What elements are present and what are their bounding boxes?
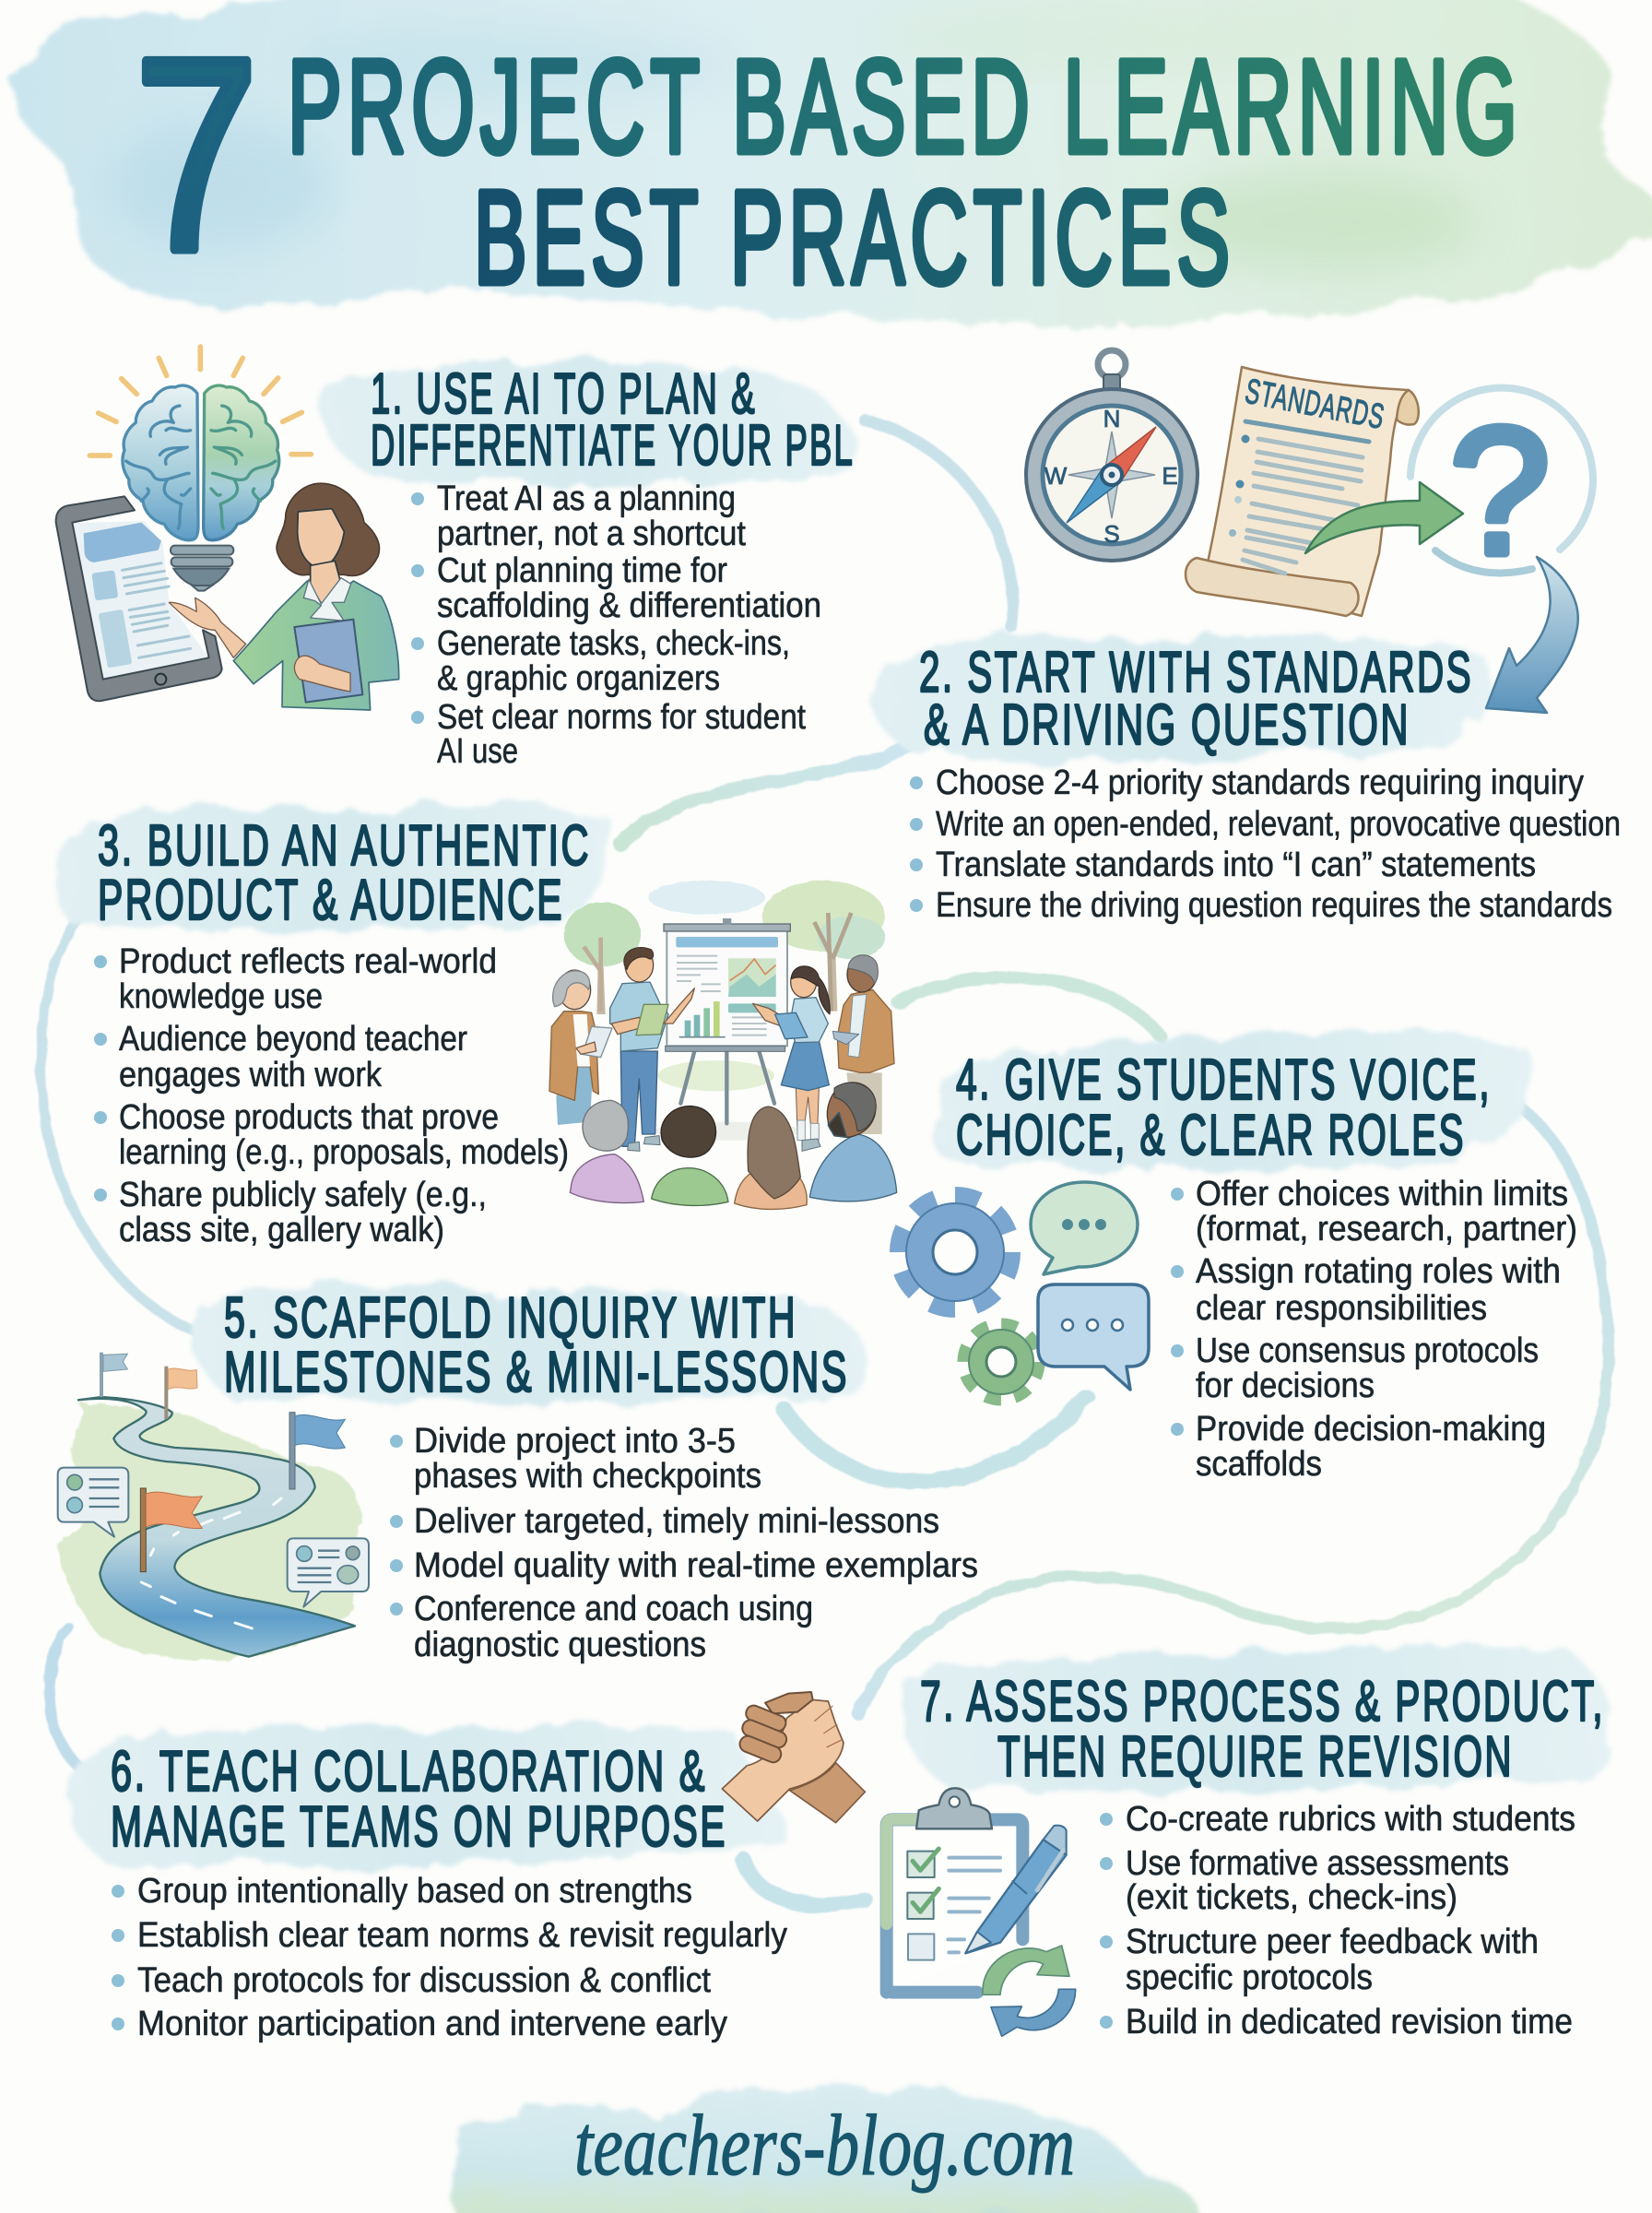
bullets 4: scaffolds (1196, 1445, 1322, 1484)
bullets 4 (1171, 1175, 1577, 1484)
bullets 1: Generate tasks, check-ins, (437, 624, 790, 663)
bullets 4: Offer choices within limits (1196, 1175, 1568, 1213)
connector 4 to 7 (858, 1105, 1608, 1715)
illustration: winding road with flags (58, 1353, 369, 1661)
person: older man with tablet (832, 955, 894, 1134)
heading 2: & A DRIVING QUESTION (924, 693, 1410, 757)
bullets 4: clear responsibilities (1196, 1289, 1487, 1328)
bullets 6: Establish clear team norms & revisit regularly (137, 1916, 787, 1955)
bullets 3: class site, gallery walk) (119, 1211, 444, 1249)
bullets 5 (390, 1422, 978, 1664)
icon: clasped hands (722, 1692, 865, 1823)
checklist speech card (58, 1468, 128, 1537)
small orange flag (164, 1367, 197, 1419)
bullets 1: AI use (437, 732, 518, 771)
icon: light rays (89, 347, 311, 456)
illustration: clipboard, pen and revision arrows (887, 1788, 1076, 2036)
connector 5 to gears (784, 1397, 1086, 1482)
watercolor wash behind title (16, 0, 1652, 326)
heading 3: 3. BUILD AN AUTHENTIC (98, 814, 591, 878)
connector 3 to 4 (899, 977, 1162, 1037)
icon: blue gear (900, 1197, 1010, 1308)
heading 1: 1. USE AI TO PLAN & (371, 362, 757, 426)
panel: step 7 (887, 1645, 1607, 2041)
person: female student presenter (753, 966, 830, 1151)
illustration: gears and speech bubbles (900, 1182, 1149, 1399)
connector 6 to 7 (743, 1859, 865, 1905)
connector 1 to 2 (864, 420, 1013, 627)
panel: step 1 (56, 347, 863, 771)
heading 7 (920, 1670, 1605, 1789)
figure: teacher (169, 483, 399, 710)
heading 3: PRODUCT & AUDIENCE (98, 869, 564, 932)
bullets 3: Product reflects real-world (119, 942, 497, 981)
bullets 3: knowledge use (119, 977, 323, 1016)
bullets 7: (exit tickets, check-ins) (1126, 1878, 1457, 1917)
small blue flag (100, 1353, 127, 1397)
road dashes (141, 1498, 281, 1628)
bullets 3: Choose products that prove (119, 1098, 499, 1137)
bullets 5: Conference and coach using (414, 1590, 813, 1628)
panel: step 5 (58, 1284, 978, 1664)
icon: blue arrow to step 2 (1486, 557, 1578, 713)
bullets 7: Build in dedicated revision time (1126, 2003, 1573, 2041)
footer (450, 2085, 1201, 2213)
bullets 3 (94, 942, 569, 1249)
connector 3 to 5 (41, 917, 198, 1332)
heading wash 2 (873, 633, 1490, 762)
bullets 1: Cut planning time for (437, 551, 727, 590)
icon: green speech bubble (1031, 1182, 1138, 1274)
large orange flag (140, 1488, 202, 1572)
icon: pen (965, 1826, 1067, 1953)
icon: compass: W (1044, 462, 1068, 490)
bullets 6 (112, 1872, 787, 2043)
footer website text: teachers-blog.com (574, 2098, 1075, 2194)
bullets 1: Treat AI as a planning (437, 479, 736, 518)
background trees and ground (564, 881, 885, 1141)
illustration: public presentation (549, 881, 897, 1209)
bullets 4: for decisions (1196, 1367, 1375, 1405)
icon: revision arrows (983, 1946, 1076, 2036)
icon: blue speech bubble (1038, 1284, 1149, 1390)
bullets 7 (1100, 1800, 1575, 2041)
bullets 6: Group intentionally based on strengths (137, 1872, 692, 1911)
icon: compass: N (1103, 405, 1120, 432)
panel: step 6 (66, 1692, 865, 2043)
bullets 5: Divide project into 3-5 (414, 1422, 736, 1461)
presentation board (664, 918, 790, 1123)
heading wash 7 (903, 1645, 1607, 1792)
bullets 1 (411, 479, 821, 771)
panel: step 4 (900, 1032, 1577, 1484)
feedback speech card (288, 1538, 369, 1607)
large blue flag (289, 1413, 345, 1489)
bullets 1: scaffolding & differentiation (437, 586, 821, 625)
heading 5: MILESTONES & MINI-LESSONS (224, 1341, 849, 1404)
icon: clipboard (887, 1788, 1022, 1993)
bullets 3: Share publicly safely (e.g., (119, 1176, 487, 1214)
heading 5: 5. SCAFFOLD INQUIRY WITH (224, 1286, 797, 1350)
icon: standards scroll: STANDARDS (1242, 373, 1387, 437)
bullets 3: Audience beyond teacher (119, 1020, 467, 1059)
bullets 2 (910, 763, 1621, 925)
footer wash (450, 2085, 1201, 2213)
heading wash 1 (322, 360, 863, 484)
bullets 2: Choose 2-4 priority standards requiring inquiry (936, 763, 1584, 802)
icon: standards scroll (1186, 367, 1419, 616)
bullets 5: Deliver targeted, timely mini-lessons (414, 1502, 939, 1541)
bullets 3: learning (e.g., proposals, models) (119, 1133, 569, 1172)
person: woman with paper (549, 970, 612, 1125)
icon: brain (123, 385, 279, 540)
heading wash 3 (55, 804, 609, 931)
icon: tablet (56, 496, 222, 701)
icon: compass (1026, 350, 1198, 561)
heading 1 (371, 362, 855, 478)
icon: bulb base (171, 546, 233, 591)
heading 5 (224, 1286, 849, 1404)
bullets 6: Teach protocols for discussion & conflict (137, 1961, 711, 2000)
bullets 7: specific protocols (1126, 1959, 1373, 1997)
illustration: compass, scroll and question (1026, 350, 1593, 713)
icon: compass: E (1162, 462, 1178, 490)
icon: compass: S (1103, 520, 1120, 548)
bullets 1: & graphic organizers (437, 659, 720, 698)
bullets 1: Set clear norms for student (437, 698, 806, 737)
icon: green arrow (1305, 482, 1463, 553)
bullets 7: Use formative assessments (1126, 1844, 1509, 1883)
bullets 2: Translate standards into “I can” statements (936, 846, 1536, 884)
heading 3 (98, 814, 591, 932)
bullets 4: Use consensus protocols (1196, 1331, 1539, 1370)
bullets 7: Co-create rubrics with students (1126, 1800, 1575, 1839)
connector 2 to 3 (620, 745, 913, 844)
bullets 5: phases with checkpoints (414, 1457, 761, 1496)
icon: question mark in circle (1410, 388, 1593, 592)
bullets 4: Assign rotating roles with (1196, 1252, 1561, 1291)
heading 4 (956, 1048, 1492, 1167)
bullets 3: engages with work (119, 1056, 383, 1095)
bullets 5: Model quality with real-time exemplars (414, 1546, 978, 1585)
connector curves (41, 420, 1608, 1905)
heading wash 6 (66, 1726, 779, 1865)
connector road to 6 (49, 1627, 88, 1775)
land (58, 1403, 361, 1661)
icon: green gear (964, 1325, 1038, 1399)
road (78, 1397, 355, 1657)
heading 2 (919, 641, 1473, 757)
audience seen from behind (570, 1083, 897, 1209)
big numeral 7: 7 (135, 2, 258, 307)
heading wash 5 (195, 1284, 867, 1404)
checklist (907, 1849, 1000, 1960)
heading 6: 6. TEACH COLLABORATION & (111, 1740, 707, 1804)
panel: step 3 (55, 804, 897, 1249)
heading 6: MANAGE TEAMS ON PURPOSE (111, 1795, 727, 1859)
bullets 1: partner, not a shortcut (437, 515, 746, 553)
bullets 6: Monitor participation and intervene early (137, 2005, 727, 2043)
panel: step 2 (873, 350, 1621, 925)
bullets 5: diagnostic questions (414, 1626, 706, 1664)
heading 1: DIFFERENTIATE YOUR PBL (371, 414, 855, 478)
icon: question mark in circle: ? (1449, 390, 1551, 592)
bullets 4: (format, research, partner) (1196, 1210, 1577, 1249)
bullets 4: Provide decision-making (1196, 1410, 1546, 1449)
heading 6 (111, 1740, 727, 1859)
title banner (16, 0, 1652, 326)
bullets 7: Structure peer feedback with (1126, 1923, 1539, 1961)
person: male student presenter (610, 947, 694, 1151)
illustration: teacher with AI brain bulb and tablet (56, 347, 399, 710)
heading wash 4 (930, 1032, 1527, 1170)
